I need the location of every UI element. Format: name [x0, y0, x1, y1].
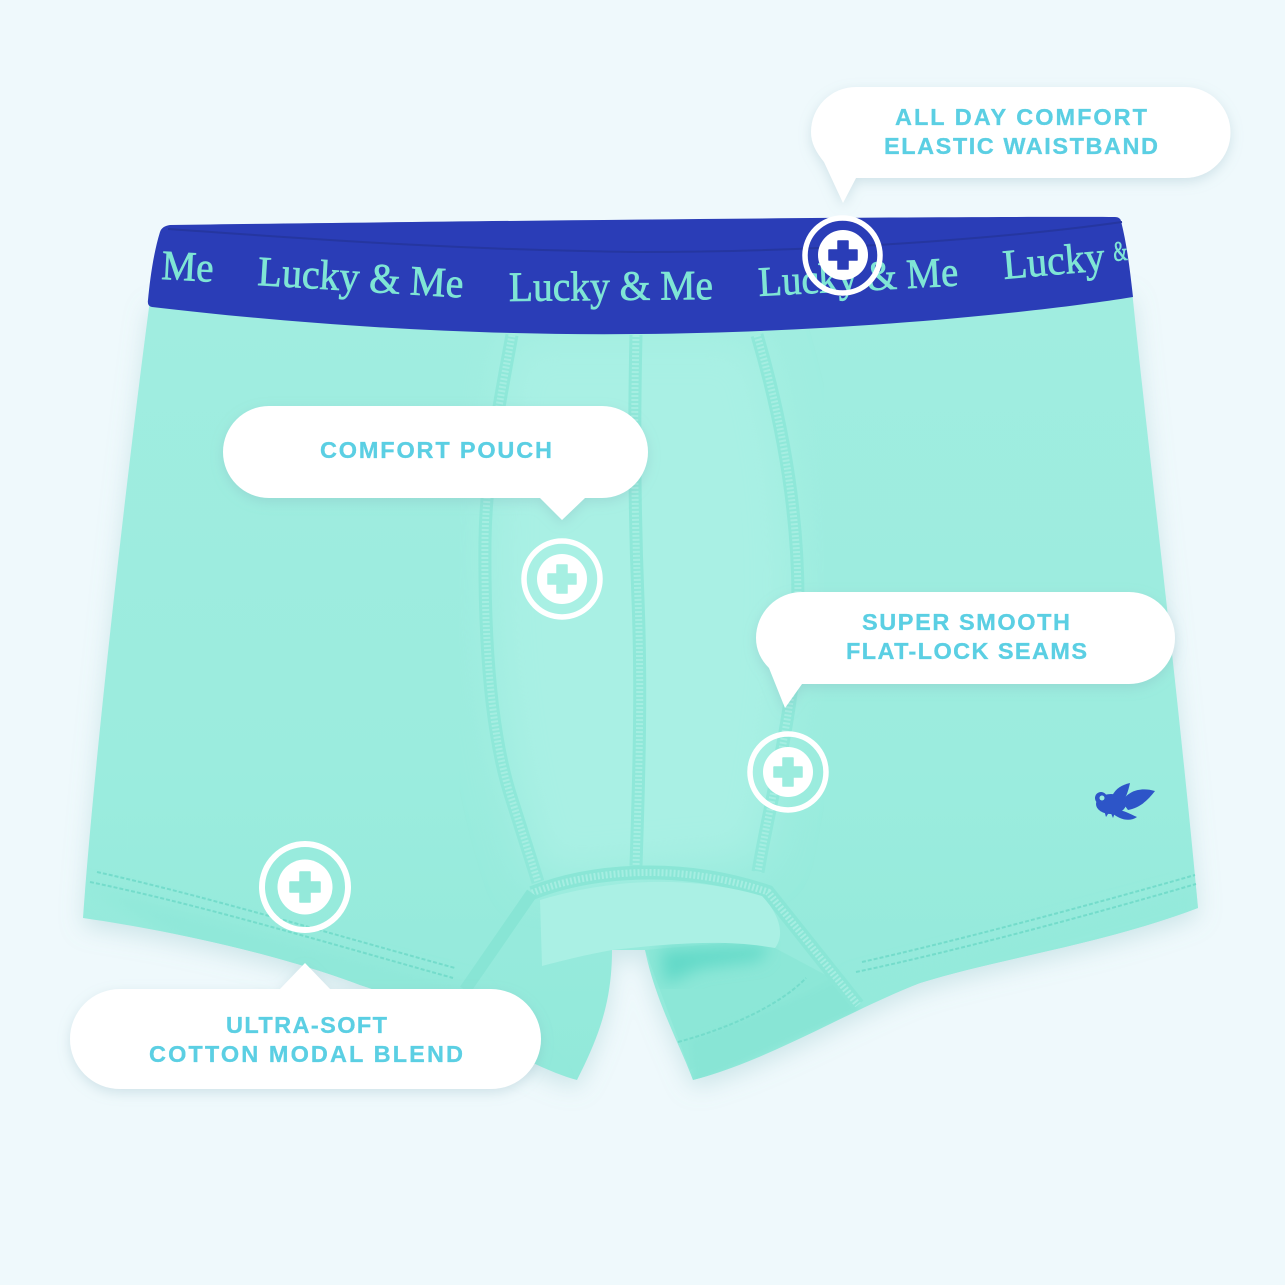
callout: flat-lock seams: FLAT-LOCK SEAMS — [846, 638, 1087, 664]
waistband lettering: Lucky — [1001, 234, 1106, 289]
waistband lettering: Lucky & Me — [509, 263, 713, 311]
callout: ultra-soft cotton modal: ULTRA-SOFT — [226, 1012, 388, 1038]
garment body — [83, 290, 1198, 1085]
waistband — [148, 217, 1133, 334]
waistband lettering: Me — [160, 243, 215, 292]
callout: all day comfort: ALL DAY COMFORT — [895, 104, 1148, 130]
callout: ultra-soft cotton modal — [70, 963, 541, 1089]
icon: goldfish logo — [1095, 783, 1155, 820]
waistband lettering: Lucky & Me — [757, 250, 959, 306]
callout: all day comfort: ELASTIC WAISTBAND — [884, 133, 1158, 159]
marker: fabric — [262, 844, 348, 930]
callout: flat-lock seams — [756, 592, 1175, 708]
waistband lettering: & — [1112, 236, 1129, 268]
callout: ultra-soft cotton modal: COTTON MODAL BLEND — [149, 1041, 463, 1067]
boxer briefs illustration — [83, 217, 1198, 1085]
callout: comfort pouch: COMFORT POUCH — [320, 437, 552, 463]
waistband lettering: Lucky & Me — [256, 249, 465, 308]
hem stitching — [90, 872, 1196, 1042]
waistband lettering — [160, 234, 1129, 311]
pouch seams — [465, 335, 858, 1005]
callout: flat-lock seams: SUPER SMOOTH — [862, 609, 1070, 635]
gusset flap — [540, 882, 780, 966]
marker: comfort pouch — [524, 541, 600, 617]
callout: all day comfort — [811, 87, 1230, 203]
marker: seams — [750, 734, 826, 810]
marker: waistband — [805, 218, 880, 293]
callout: comfort pouch — [223, 406, 648, 520]
